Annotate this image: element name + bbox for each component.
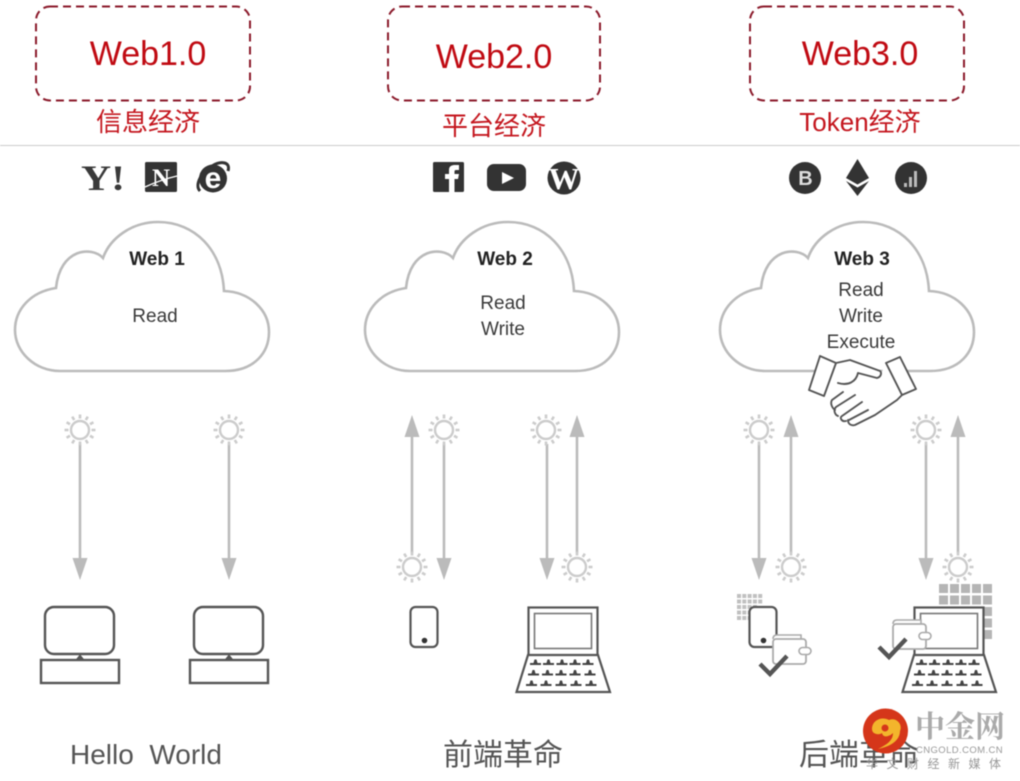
subtitle: 信息经济: 信息经济 <box>96 107 200 137</box>
data arrows: Web 1 <box>64 414 244 580</box>
column: Web3.0 <box>720 6 996 772</box>
icon: handshake <box>809 356 916 425</box>
logo mark <box>863 708 908 754</box>
column: Web2.0 <box>365 6 619 772</box>
cloud: Web 1: Web 1 <box>129 249 185 270</box>
cloud: Web 3: Write <box>839 306 883 327</box>
cloud: Web 1: Read <box>132 306 178 327</box>
icons: Facebook, YouTube, WordPress <box>433 161 580 196</box>
subtitle: 平台经济: 平台经济 <box>442 111 546 141</box>
heading box: Web3.0 <box>750 6 964 100</box>
cloud: Web 2: Write <box>481 319 525 340</box>
icons: Bitcoin, Ethereum, chart token <box>789 159 927 196</box>
cloud: Web 2: Read <box>480 293 526 314</box>
subtitle: Token经济: Token经济 <box>799 107 921 137</box>
cloud: Web 1 <box>15 222 269 371</box>
icons: Bitcoin, Ethereum, chart token: B <box>798 168 813 190</box>
cloud: Web 3 <box>720 222 974 371</box>
cloud: Web 3: Execute <box>827 332 895 353</box>
caption: 后端革命: 后端革命 <box>799 739 919 772</box>
watermark: 中金网 logo <box>863 702 1010 771</box>
heading box: Web3.0: Web3.0 <box>802 35 918 73</box>
cloud: Web 3: Read <box>838 280 884 301</box>
cloud: Web 2 <box>365 222 619 371</box>
icons: Facebook, YouTube, WordPress: W <box>548 161 580 196</box>
data arrows: Web 2 <box>396 414 592 582</box>
devices: desktops <box>41 607 268 683</box>
heading box: Web1.0 <box>36 6 250 100</box>
icon: laptop with wallet and check <box>879 608 996 692</box>
icons: Yahoo, Netscape, IE: Y! <box>81 158 125 198</box>
icons: Yahoo, Netscape, IE: N <box>152 165 170 192</box>
icon: phone with wallet and check <box>750 607 811 674</box>
watermark tagline: 华文财经新媒体 <box>866 756 1010 771</box>
heading box: Web2.0: Web2.0 <box>436 38 552 76</box>
devices: phone and laptop <box>410 607 610 692</box>
icons: Yahoo, Netscape, IE: e <box>205 162 221 195</box>
icon: token grid large <box>939 584 992 639</box>
divider line <box>0 145 1020 146</box>
cloud: Web 2: Web 2 <box>477 249 533 270</box>
heading box: Web1.0: Web1.0 <box>90 35 206 73</box>
watermark text: 中金网 <box>915 702 1005 746</box>
heading box: Web2.0 <box>388 6 600 100</box>
icons: Yahoo, Netscape, IE <box>81 158 229 198</box>
watermark domain: CNGOLD.COM.CN <box>916 745 1003 756</box>
icon: token grid small <box>737 594 762 620</box>
caption: Hello World: Hello World <box>70 739 222 770</box>
cloud: Web 3: Web 3 <box>834 249 890 270</box>
data arrows: Web 3 <box>744 414 974 582</box>
column: Web1.0 <box>15 6 269 770</box>
caption: 前端革命: 前端革命 <box>443 739 563 772</box>
